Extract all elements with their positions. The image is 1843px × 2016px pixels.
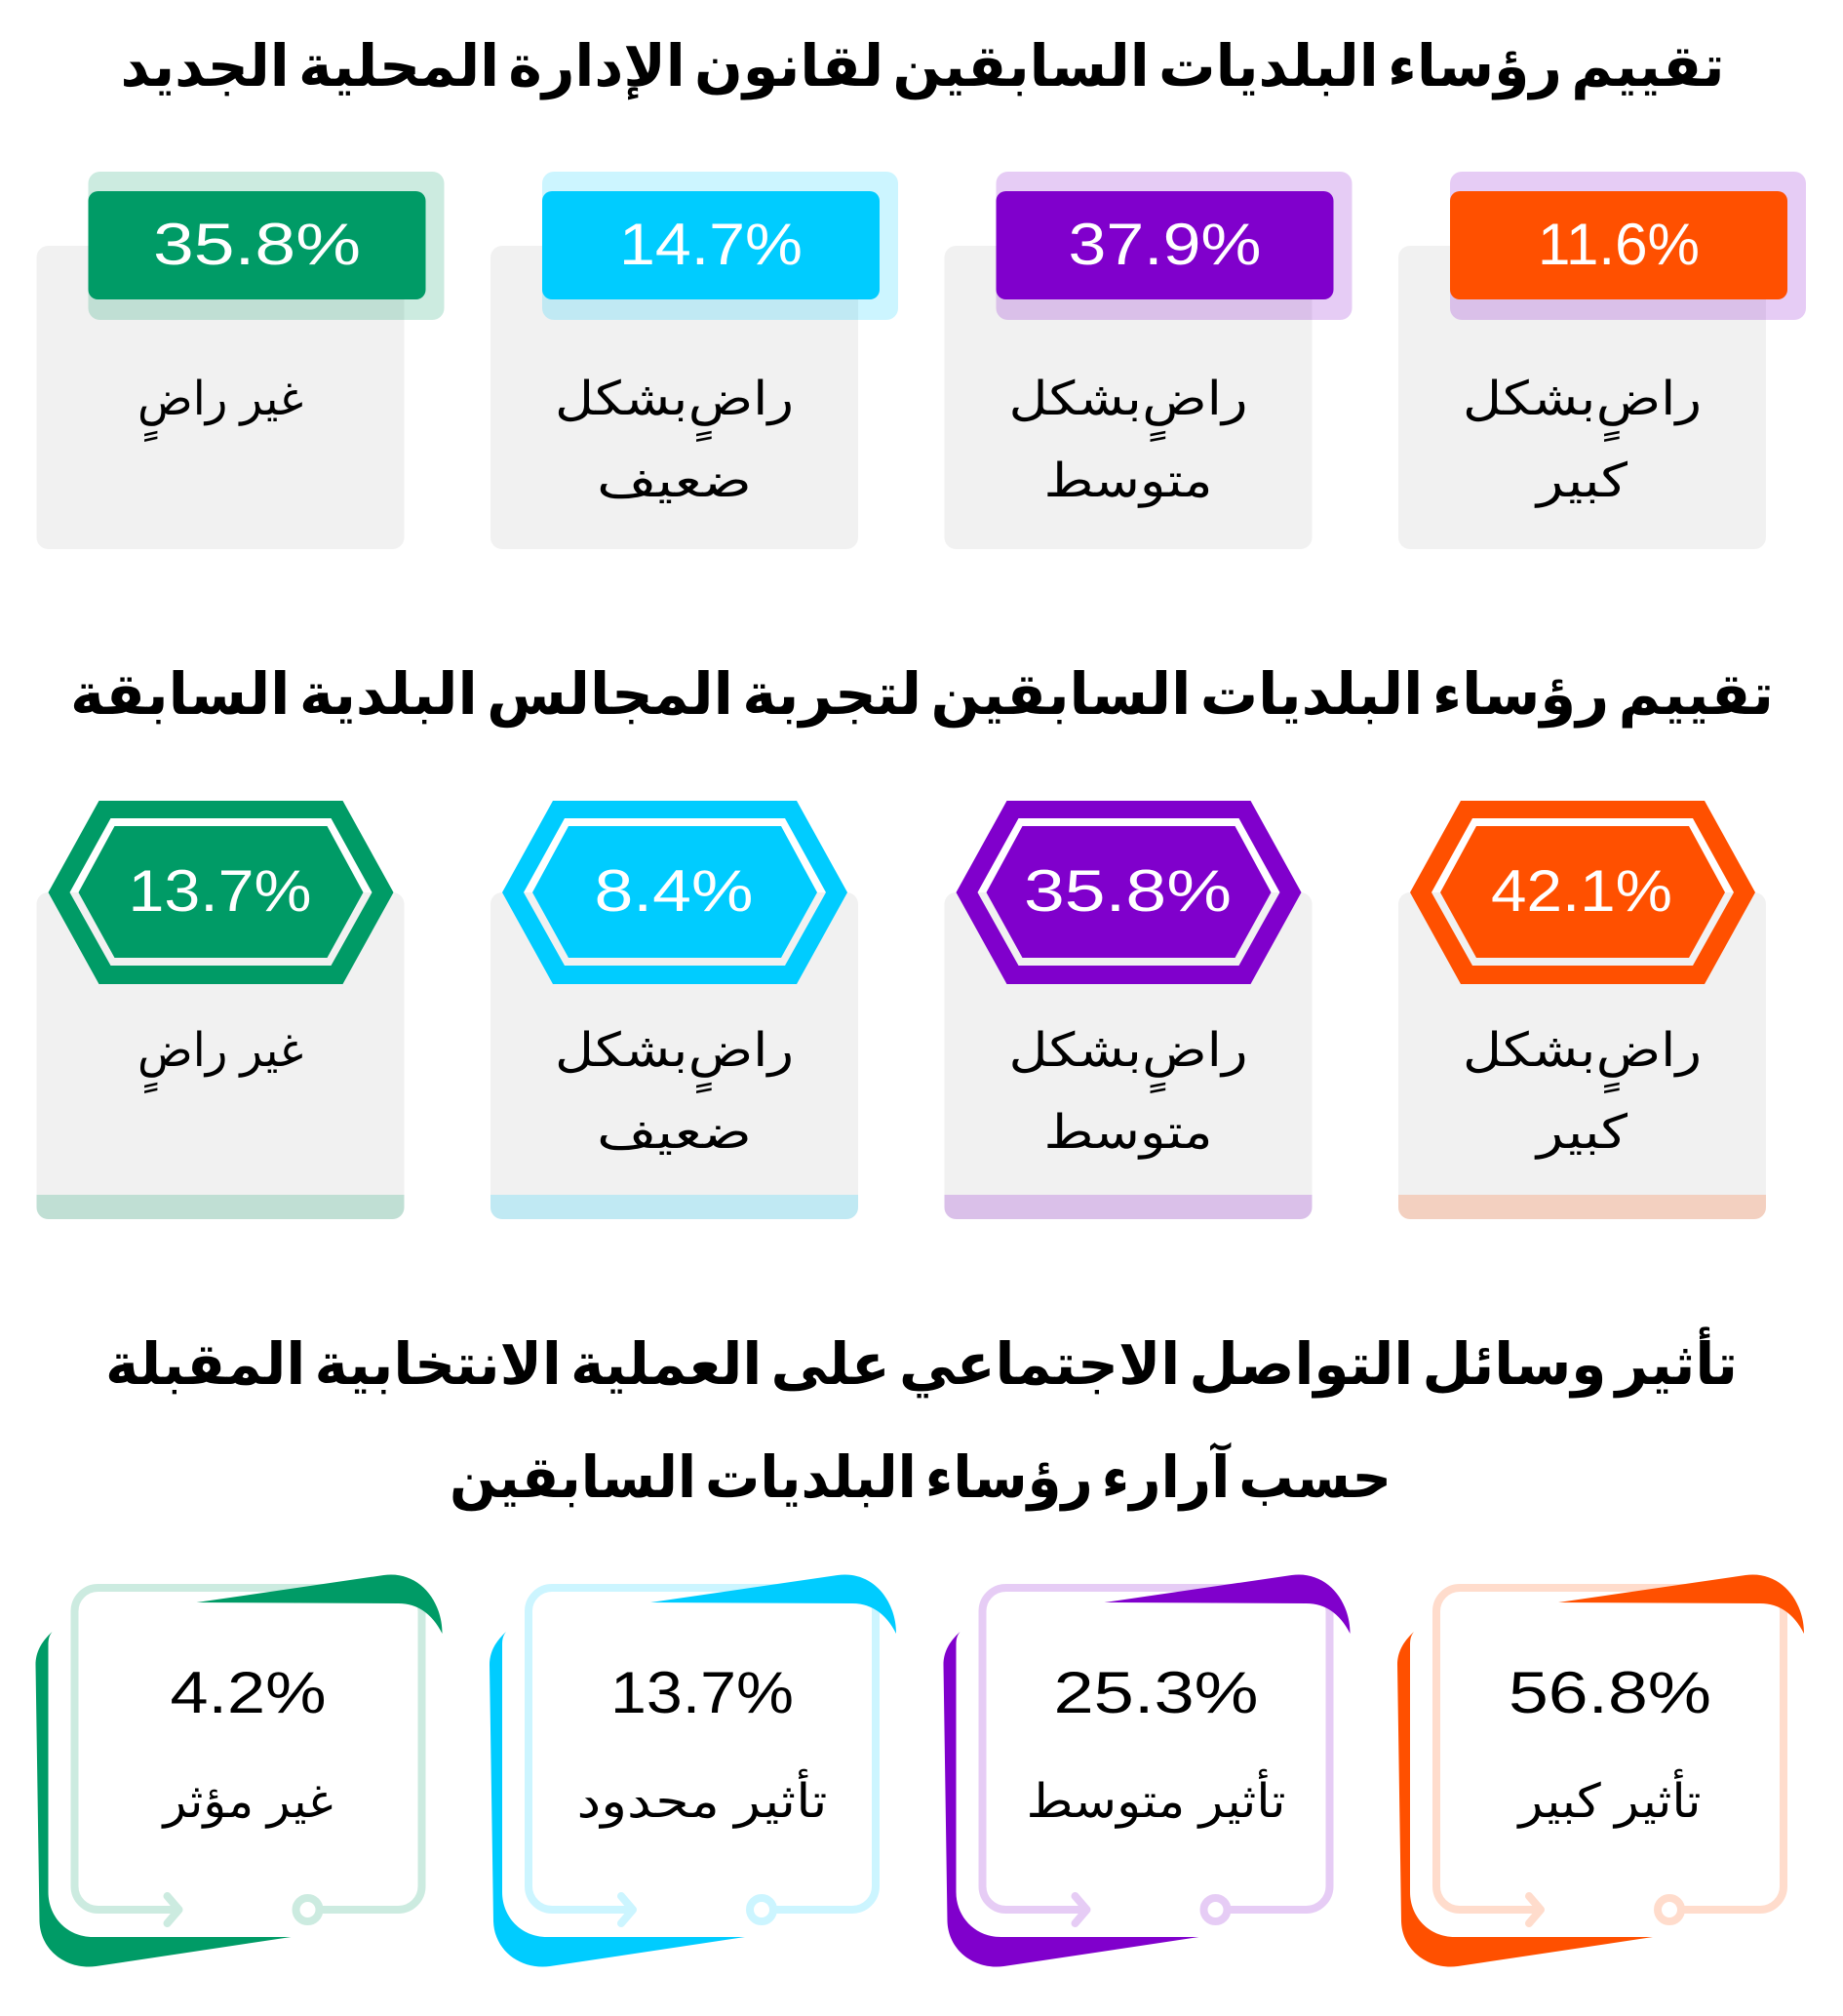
title: section 1: تقييم رؤساء البلديات السابقين لقانون الإدارة المحلية الجديد	[121, 34, 1724, 100]
panel: section 1 card – medium satisfaction: متوسط	[1043, 455, 1213, 508]
panel: section 2 card – large: 42.1%	[1491, 858, 1672, 924]
panel: section 1 card – not satisfied	[37, 172, 445, 549]
panel: section 1 card – large satisfaction: 11.6%	[1538, 212, 1700, 277]
panel: section 2 card – weak: ضعيف	[597, 1107, 752, 1159]
panel: section 3 card – medium influence	[944, 1574, 1350, 1967]
title: section 3 line 2: حسب آرارء رؤساء البلديات السابقين	[450, 1442, 1392, 1512]
panel: section 2 card – large	[1398, 801, 1766, 1219]
panel: section 2 card – weak: 8.4%	[595, 858, 753, 924]
panel: section 3 card – limited influence	[490, 1574, 896, 1967]
panel: section 2 card – weak: راضٍ بشكل	[555, 1025, 794, 1093]
panel: section 2 card – medium: متوسط	[1043, 1107, 1213, 1160]
panel: section 3 card – medium influence: 25.3%	[1053, 1660, 1258, 1725]
panel: section 1 card – weak satisfaction: 14.7%	[619, 212, 803, 277]
panel: section 1 card – weak satisfaction: راضٍ بشكل	[555, 374, 794, 442]
panel: section 2 card – medium: راضٍ بشكل	[1008, 1025, 1248, 1093]
panel: section 1 card – medium satisfaction: 37.9%	[1069, 212, 1262, 277]
panel: section 3 card – no influence: 4.2%	[170, 1660, 326, 1725]
panel: section 1 card – large satisfaction: راضٍ بشكل	[1463, 374, 1702, 442]
panel: section 2 card – medium: 35.8%	[1024, 858, 1232, 924]
panel: section 3 card – large influence	[1397, 1574, 1804, 1967]
panel: section 1 card – not satisfied: غير راضٍ	[137, 374, 303, 442]
panel: section 3 card – large influence: 56.8%	[1509, 1660, 1711, 1725]
title: section 2: تقييم رؤساء البلديات السابقين لتجربة المجالس البلدية السابقة	[70, 662, 1774, 729]
panel: section 1 card – large satisfaction: كبير	[1535, 455, 1627, 508]
panel: section 1 card – weak satisfaction	[490, 172, 898, 549]
panel: section 2 card – not satisfied	[37, 801, 404, 1219]
panel: section 2 card – medium	[944, 801, 1313, 1219]
panel: section 2 card – large: راضٍ بشكل	[1463, 1025, 1702, 1093]
title: section 3 line 1: تأثير وسائل التواصل الاجتماعي على العملية الانتخابية المقبلة	[105, 1326, 1738, 1399]
panel: section 3 card – large influence: تأثير كبير	[1516, 1768, 1701, 1829]
panel: section 1 card – large satisfaction	[1398, 172, 1806, 549]
panel: section 3 card – limited influence: 13.7%	[610, 1660, 794, 1725]
panel: section 2 card – large: كبير	[1535, 1107, 1627, 1160]
panel: section 2 card – weak	[490, 801, 858, 1219]
panel: section 1 card – medium satisfaction	[944, 172, 1352, 549]
panel: section 1 card – not satisfied: 35.8%	[153, 212, 361, 277]
panel: section 1 card – weak satisfaction: ضعيف	[597, 455, 752, 507]
panel: section 3 card – medium influence: تأثير متوسط	[1026, 1768, 1285, 1829]
panel: section 3 card – limited influence: تأثير محدود	[577, 1768, 827, 1829]
panel: section 2 card – not satisfied: غير راضٍ	[137, 1025, 303, 1093]
panel: section 3 card – no influence	[35, 1574, 443, 1967]
panel: section 1 card – medium satisfaction: راضٍ بشكل	[1008, 374, 1248, 442]
panel: section 2 card – not satisfied: 13.7%	[129, 858, 312, 924]
panel: section 3 card – no influence: غير مؤثر	[161, 1776, 333, 1829]
